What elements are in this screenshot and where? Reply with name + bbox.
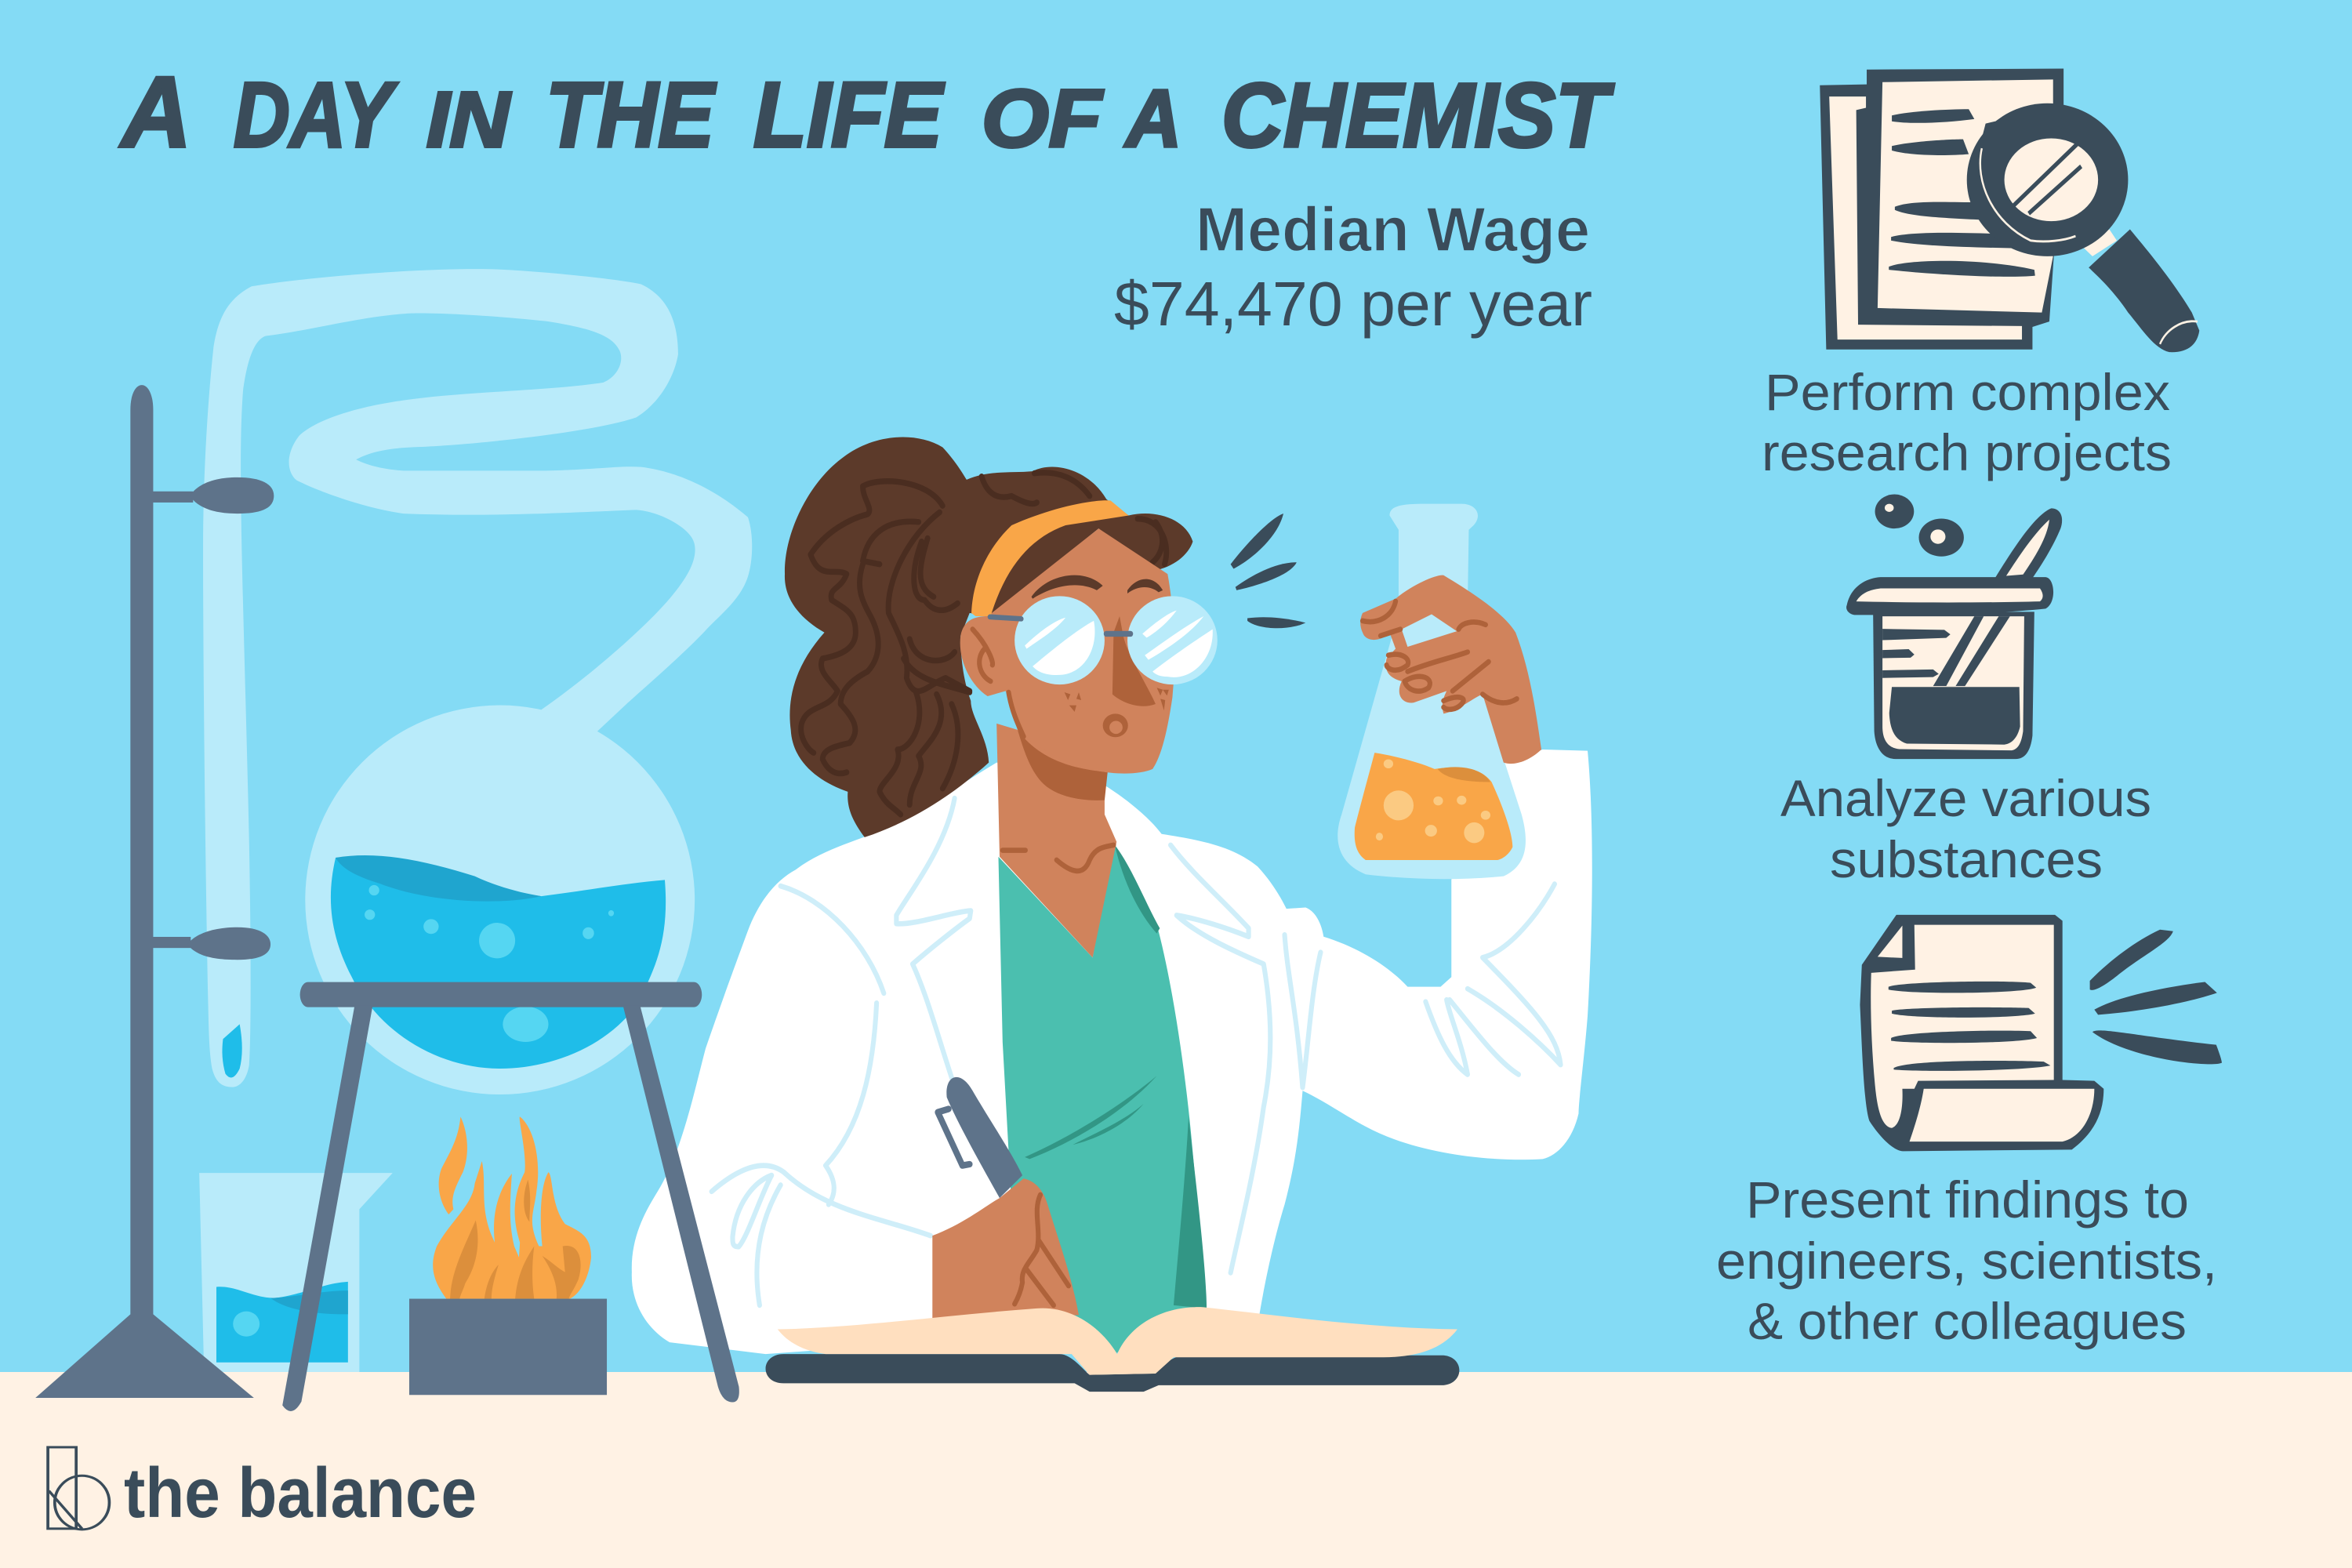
title: OF (982, 74, 1104, 165)
tripod (282, 982, 739, 1411)
label: perform research: research projects (1762, 423, 2172, 481)
writing hand (932, 1178, 1079, 1322)
logo: the balance (48, 1447, 477, 1533)
icon: documents and magnifying glass (1820, 69, 2199, 352)
surprise motion lines (1231, 514, 1305, 628)
label: analyze substances: Analyze various (1780, 769, 2151, 827)
label: present findings (1716, 1171, 2217, 1350)
headband (971, 500, 1129, 616)
desk surface (0, 1372, 2352, 1568)
hand holding flask (1360, 575, 1541, 764)
logo wordmark: the balance (124, 1454, 477, 1533)
icon: beaker with bubbles (1846, 495, 2062, 759)
open notebook (766, 1307, 1459, 1392)
title: DAY (234, 64, 398, 167)
hair (785, 437, 1192, 837)
round flask (305, 706, 695, 1094)
label: analyze substances (1780, 769, 2151, 888)
title: IN (426, 76, 511, 164)
title: A (1123, 74, 1181, 165)
glasses (990, 596, 1218, 684)
label: present findings: & other colleagues (1748, 1292, 2187, 1350)
retort stand (35, 385, 274, 1398)
drop in tube (222, 1024, 242, 1077)
beaker (199, 1173, 393, 1372)
median wage text: Median Wage (1196, 194, 1590, 264)
label: present findings: engineers, scientists, (1716, 1232, 2217, 1290)
flames (433, 1116, 591, 1299)
scrubs (998, 844, 1207, 1354)
distillation apparatus (35, 269, 752, 1411)
neck (996, 724, 1116, 957)
median wage text: $74,470 per year (1114, 269, 1592, 339)
glass tube (203, 269, 752, 1087)
orange flask (1338, 504, 1526, 879)
chemist figure (632, 437, 1592, 1392)
lab coat (632, 750, 1592, 1354)
title: CHEMIST (1221, 64, 1615, 166)
face (960, 528, 1174, 774)
pen (938, 1077, 1022, 1198)
title: LIFE (753, 64, 945, 167)
median wage text (1114, 194, 1592, 339)
label: perform research: Perform complex (1765, 363, 2170, 421)
logo mark (48, 1447, 109, 1530)
label: perform research (1762, 363, 2172, 481)
title (119, 56, 1615, 169)
burner (409, 1299, 607, 1395)
icon: scroll with rays (1860, 915, 2222, 1151)
title: THE (546, 64, 717, 167)
label: analyze substances: substances (1830, 830, 2103, 888)
title: A (119, 56, 191, 169)
label: present findings: Present findings to (1746, 1171, 2189, 1229)
